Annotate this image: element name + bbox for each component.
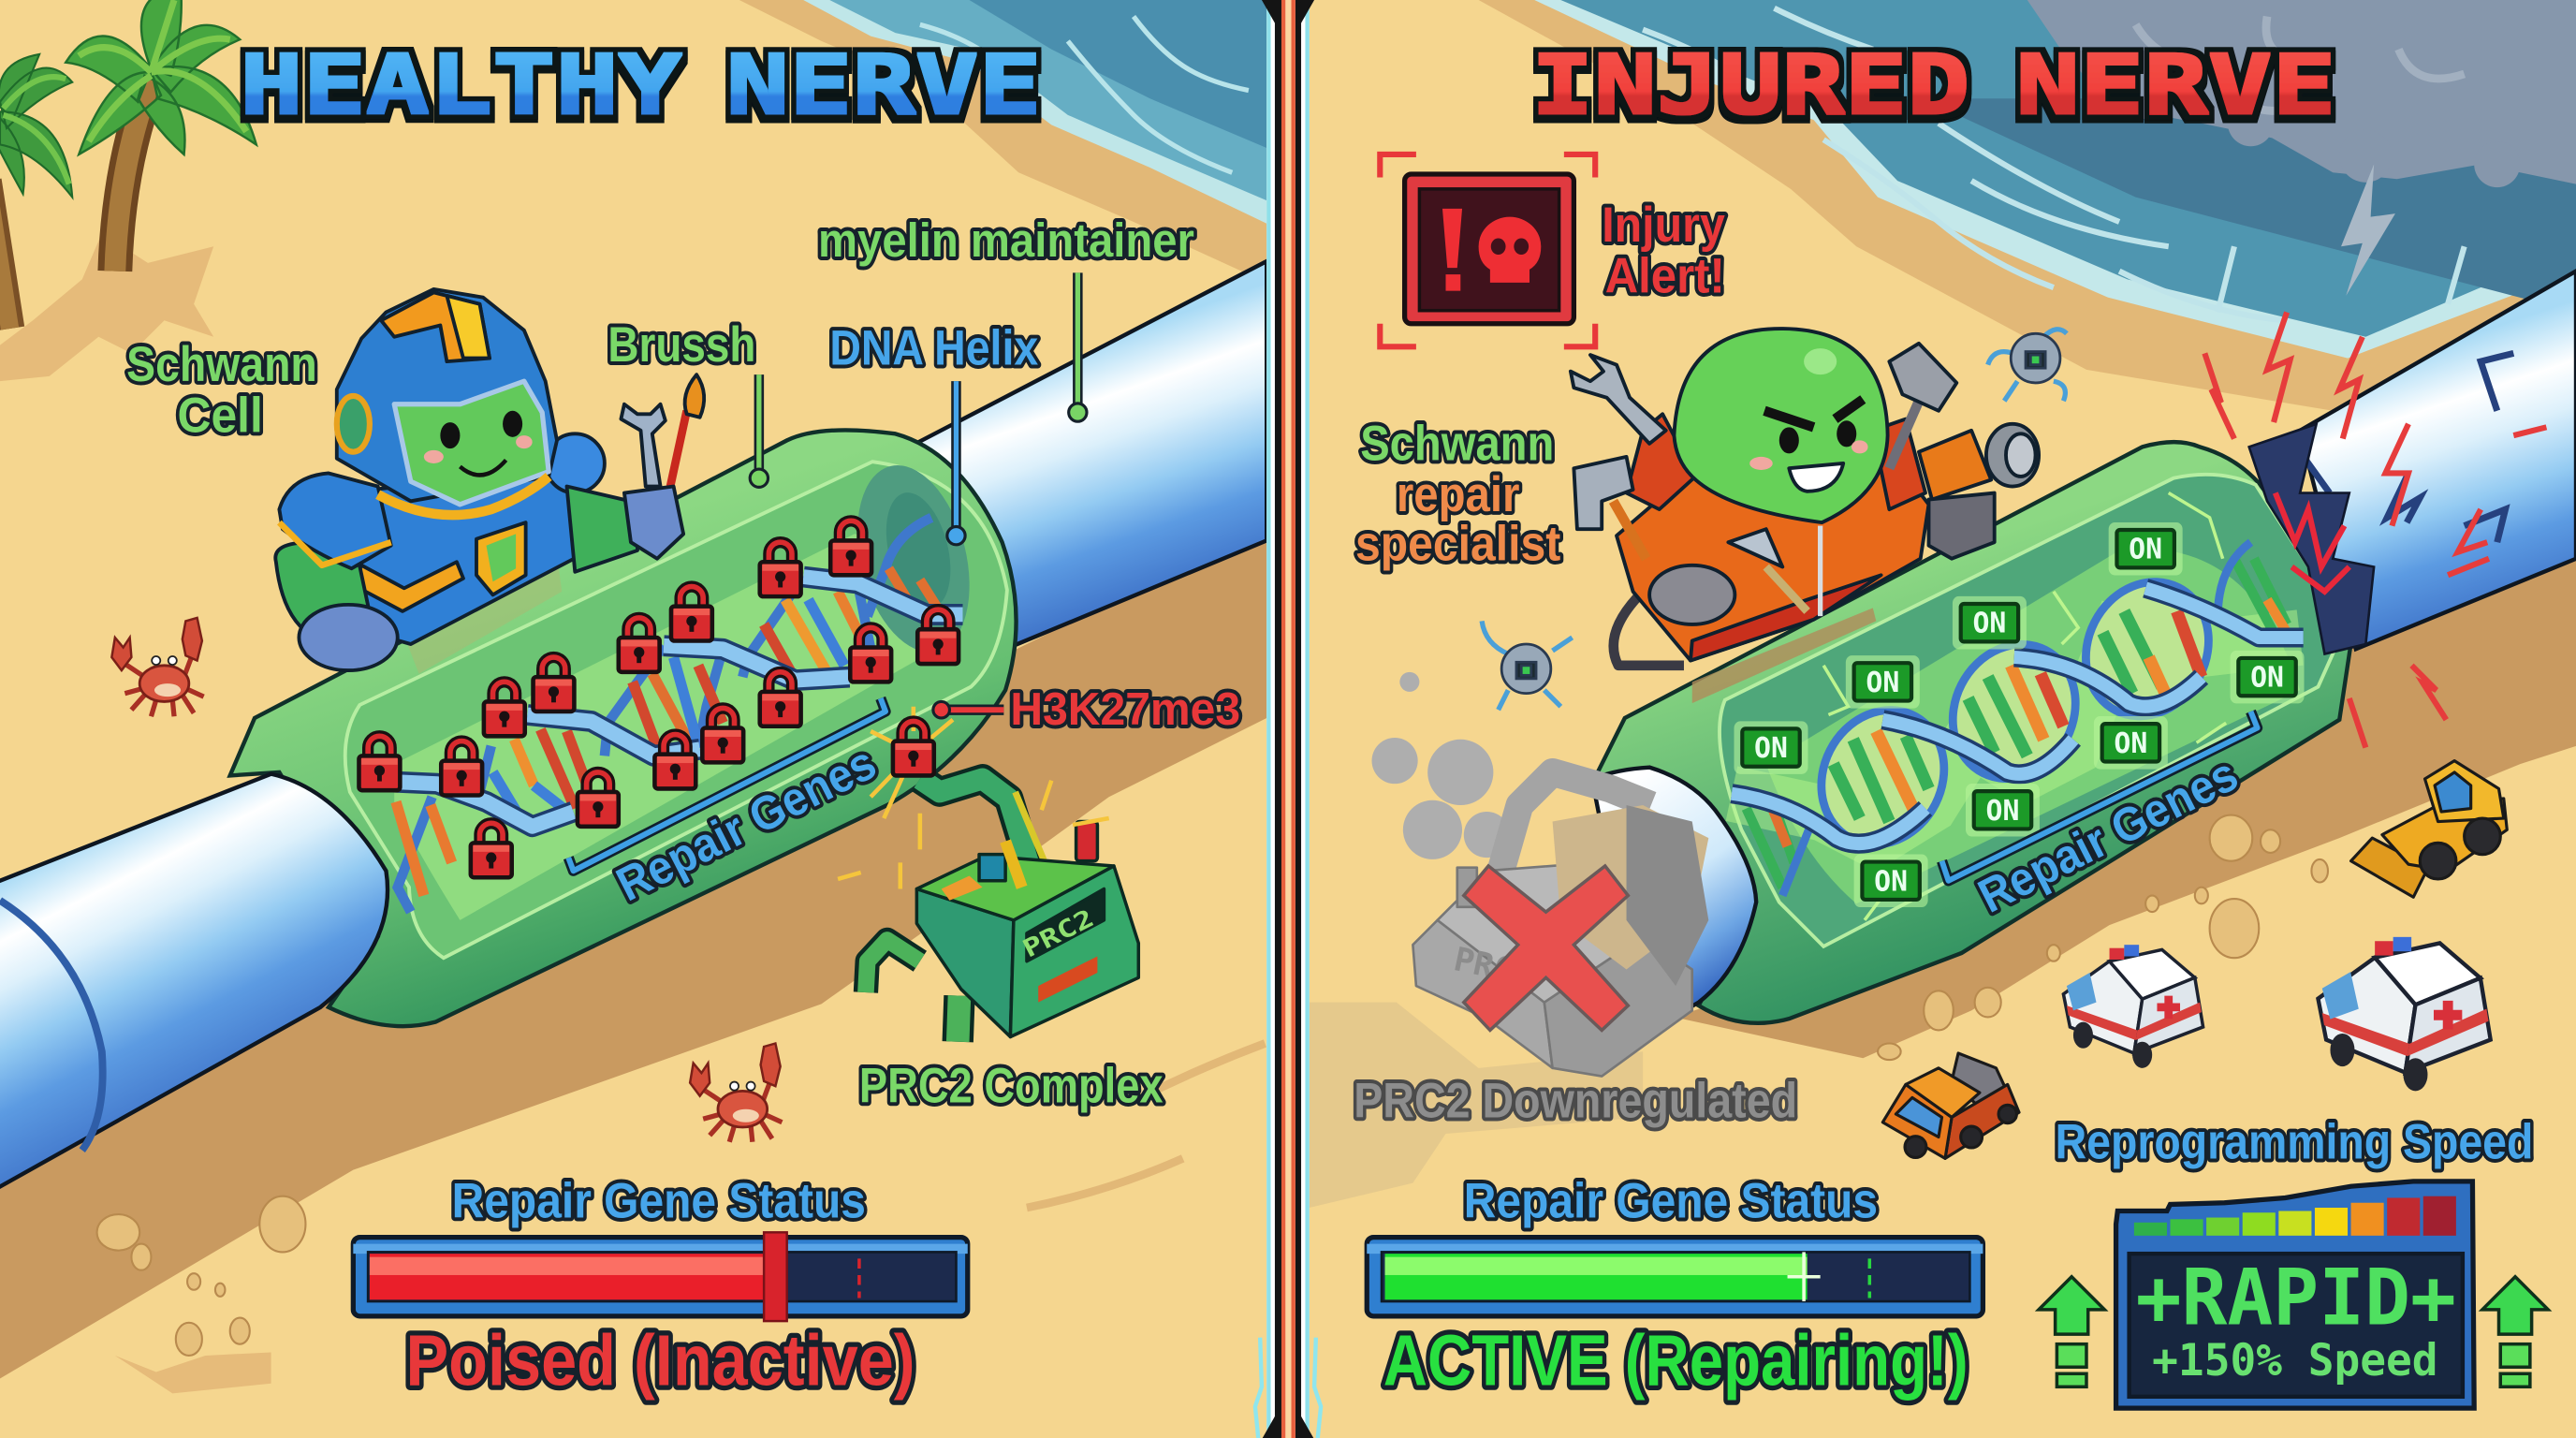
chest shield [476, 522, 526, 594]
bulldozer [2351, 761, 2507, 897]
green sheath capsule [230, 430, 1017, 1026]
head [1674, 329, 1888, 522]
rear leg [866, 940, 920, 992]
palm shadow [0, 233, 213, 381]
label: Schwann repair specialist: repair [1397, 467, 1519, 522]
title: injured nerve: INJURED [1531, 37, 1969, 133]
storm sea [1479, 0, 2576, 411]
target lock with sparks [838, 707, 1109, 889]
label: Schwann repair specialist: specialist [1355, 516, 1560, 571]
cab [2425, 761, 2504, 822]
screen [2130, 1254, 2463, 1397]
label: PRC2 Complex: PRC2 Complex [859, 1059, 1164, 1114]
right shoulder [546, 433, 605, 493]
ambulance small [2063, 945, 2203, 1068]
tube rupture [2249, 424, 2374, 654]
face [394, 381, 549, 505]
grey load [1952, 1053, 2008, 1108]
smoke [1372, 672, 1510, 859]
label: Brussh with leader: Brussh [607, 317, 755, 373]
PRC2 screen text: PRC2 [1018, 904, 1099, 963]
crab bottom [690, 1043, 782, 1142]
ON badges: ON [1874, 865, 1908, 898]
glow [1732, 633, 2300, 840]
ear piece [337, 396, 370, 452]
green sheath capsule [1592, 442, 2352, 1023]
PRC2 complex machine [866, 779, 1138, 1042]
LED level meter [2134, 1196, 2456, 1236]
wrench [1571, 355, 1666, 444]
label: Schwann Cell [126, 337, 317, 444]
cab front [1882, 1084, 1952, 1158]
label: injury alert: Alert! [1605, 248, 1725, 303]
PRC2 screen [1027, 889, 1104, 961]
ON badges [1734, 522, 2305, 907]
right sleeve [1873, 419, 1925, 509]
dirt path [1674, 559, 2576, 1058]
glove left [1649, 565, 1734, 624]
status gauge: poised [353, 1174, 968, 1401]
label: myelin maintainer with leader [818, 213, 1194, 421]
H3K27me3 locks [359, 521, 959, 877]
repair genes label: Repair Genes [608, 736, 884, 911]
crab left [111, 618, 204, 716]
blade [2351, 838, 2428, 897]
brush [670, 411, 687, 487]
label: DNA Helix with leader: DNA Helix [829, 321, 1038, 376]
gauge heading: Repair Gene Status [1464, 1174, 1878, 1229]
title: healthy nerve: NERVE [726, 37, 1042, 133]
repair genes bracket [1942, 712, 2258, 881]
title: healthy nerve: HEALTHY [240, 37, 682, 133]
sand debris [97, 1196, 305, 1356]
smile [460, 460, 506, 475]
label: Schwann Cell: Cell [178, 389, 263, 444]
grin [1789, 463, 1843, 492]
alert icon [1380, 154, 1595, 346]
helmet [337, 289, 557, 501]
label: DNA Helix with leader [829, 321, 1038, 545]
label: H3K27me3: H3K27me3 [1010, 684, 1240, 735]
ambulance large [2318, 937, 2491, 1091]
truck bed [1945, 1084, 2019, 1158]
dirt path [0, 526, 1266, 1379]
gauge status text: ACTIVE (Repairing!) [1383, 1321, 1969, 1401]
tube stub [1592, 768, 1756, 1035]
speed text: +150% Speed [2152, 1335, 2438, 1387]
title: injured nerve: NERVE [2016, 37, 2336, 133]
gauntlet left [299, 605, 398, 670]
rapid text: +RAPID+ [2136, 1254, 2456, 1343]
panel: healthy nerve [0, 0, 1266, 1401]
status gauge: active [1367, 1174, 1983, 1401]
repair genes label: Repair Genes [1970, 747, 2246, 923]
ON badges: ON [1866, 667, 1899, 699]
speed panel [2116, 1181, 2474, 1408]
mallet [1889, 386, 1925, 468]
robot arm [920, 779, 1032, 874]
beach water [739, 0, 1266, 283]
chest hammer [1766, 567, 1808, 611]
label: Schwann repair specialist [1355, 416, 1560, 571]
armor belt [353, 562, 463, 611]
arrow right [2482, 1277, 2548, 1387]
title: healthy nerve [240, 37, 1042, 133]
brows [1764, 399, 1863, 427]
storm cloud [2027, 0, 2576, 296]
glove right [1928, 493, 1995, 559]
character: Schwann repair specialist [1571, 329, 2039, 666]
wrench [621, 404, 666, 487]
armor body [363, 480, 573, 646]
ON badges: ON [1754, 732, 1788, 765]
right arm [567, 487, 637, 572]
eyes [440, 411, 522, 448]
front leg [958, 996, 959, 1042]
label: injury alert [1602, 198, 1725, 303]
cab top [1906, 1068, 1980, 1117]
label: myelin maintainer with leader: myelin maintainer [818, 213, 1194, 267]
hose [1614, 592, 1684, 666]
DNA helix active [1732, 493, 2304, 920]
label: Schwann repair specialist: Schwann [1360, 416, 1554, 471]
gauntlet right [624, 487, 683, 559]
red lightning bolts [2204, 312, 2546, 748]
ON badges: ON [2114, 727, 2147, 760]
faded PRC2 text: PRC [1451, 940, 1516, 990]
arrow left [2039, 1277, 2104, 1387]
drone bottom [1482, 621, 1573, 710]
repair genes bracket [568, 698, 886, 871]
gauge bar [1367, 1238, 1983, 1316]
title: injured nerve [1531, 37, 2336, 133]
left sleeve [1627, 414, 1695, 509]
ON badges: ON [1986, 795, 2019, 828]
red vent [1038, 956, 1097, 1003]
left arm [275, 542, 372, 638]
ON badges: ON [2250, 662, 2284, 695]
orange suit [1617, 440, 1928, 661]
eyes [1779, 420, 1856, 453]
label: injury alert: Injury [1602, 198, 1725, 253]
left shoulder [279, 473, 391, 568]
character: Schwann cell in armor [275, 289, 704, 670]
palm tree left [0, 54, 72, 329]
gauge status text: Poised (Inactive) [406, 1321, 915, 1401]
gauge bar [353, 1232, 968, 1321]
gauge heading: Repair Gene Status [452, 1174, 866, 1229]
left hammer [1614, 501, 1647, 559]
status cylinder [1076, 822, 1097, 861]
label: PRC2 Downregulated: PRC2 Downregulated [1354, 1073, 1797, 1128]
ON badges: ON [1972, 608, 2006, 640]
collar [378, 477, 549, 515]
broken myelin tube [2300, 271, 2576, 649]
palm tree right [66, 0, 256, 271]
chassis [2382, 799, 2507, 871]
ON badges: ON [2129, 534, 2162, 566]
repair truck [1882, 1053, 2019, 1158]
drone top [1988, 330, 2067, 401]
dirt clods [1878, 815, 2328, 1060]
drill [1919, 431, 1991, 500]
center divider [1255, 0, 1321, 1438]
panel: injured nerve [1310, 0, 2576, 1408]
label: Brussh with leader [607, 317, 768, 487]
DNA helix [365, 518, 962, 912]
label: Schwann Cell: Schwann [126, 337, 317, 392]
red X [1464, 866, 1628, 1030]
zipper [1819, 526, 1822, 616]
myelin tube lower left [0, 774, 388, 1191]
myelin tube upper right [887, 261, 1266, 657]
ash patch [1310, 1003, 1643, 1208]
wrecked PRC2 machine [1412, 772, 1708, 1077]
